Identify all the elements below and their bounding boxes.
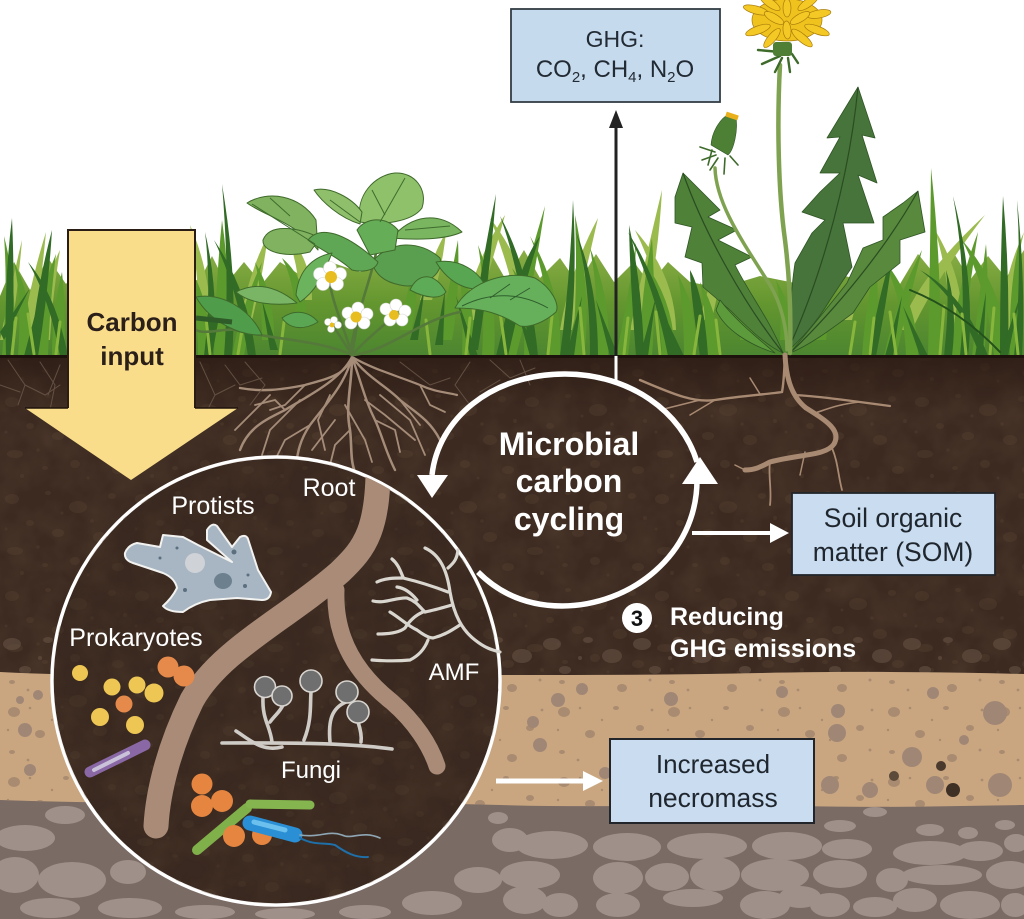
- fungi hyphae and sporangia: [222, 670, 392, 749]
- AMF hyphae: [372, 548, 500, 661]
- strawberry plant: [196, 173, 557, 355]
- grass blades, olive back layer: [0, 190, 1024, 340]
- microbial carbon cycling label: cycling: [514, 501, 624, 537]
- microbial carbon cycling label: Microbial: [499, 426, 639, 462]
- dandelion plant: [675, 0, 925, 353]
- yellow carbon input arrow: [25, 230, 238, 480]
- label: AMF: AMF: [429, 659, 479, 686]
- GHG box: , CH: [580, 56, 628, 83]
- grass highlights: [12, 306, 1018, 354]
- necromass box: Increased: [656, 749, 770, 779]
- strawberry leaves: [196, 173, 557, 335]
- grass layer: [0, 168, 1024, 357]
- strawberry plant roots: [235, 357, 457, 472]
- grass dark stolon: [910, 290, 1000, 352]
- carbon input label: Carbon: [86, 307, 178, 337]
- grass blades, dark green: [0, 184, 1023, 356]
- GHG emission arrow: [609, 110, 623, 380]
- SOM box: Soil organic: [824, 503, 962, 533]
- strawberry stems: [196, 240, 460, 355]
- arrow to SOM: [692, 523, 789, 543]
- soil layer: topsoil: [0, 355, 1024, 680]
- GHG box: 4: [628, 69, 636, 86]
- strawberry flowers: [314, 262, 411, 332]
- arrow to necromass: [496, 771, 603, 791]
- GHG box: GHG:: [586, 26, 644, 52]
- GHG box: 2: [572, 69, 580, 86]
- prokaryotes yellow and orange cocci: [72, 656, 194, 734]
- GHG box: O: [676, 56, 694, 83]
- amoeba protist: [125, 525, 271, 612]
- microbial cycle ring: [417, 374, 718, 606]
- reducing GHG emissions note: Reducing: [670, 603, 784, 631]
- faint surface roots: [0, 360, 535, 415]
- GHG box: 2: [667, 69, 676, 86]
- root in circle: [156, 452, 437, 826]
- dandelion flower head: [742, 0, 832, 72]
- GHG box: [511, 9, 720, 102]
- soil layer: sand: [0, 672, 1024, 807]
- circle inset: soil microbes: [50, 452, 505, 905]
- GHG box: , N: [636, 56, 667, 83]
- reducing GHG emissions note: GHG emissions: [670, 635, 856, 663]
- dandelion roots: [640, 355, 890, 505]
- necromass box: necromass: [648, 783, 778, 813]
- microbial carbon cycling label: carbon: [516, 463, 622, 499]
- SOM box: matter (SOM): [813, 537, 973, 567]
- grass base mass: [0, 250, 1024, 357]
- label: Protists: Protists: [171, 492, 255, 520]
- dandelion leaves: [675, 87, 925, 353]
- label: Prokaryotes: Prokaryotes: [69, 624, 203, 652]
- grass blades, mid green: [2, 168, 1023, 356]
- dandelion bud: [700, 114, 738, 174]
- sand pebbles: [16, 683, 1012, 798]
- gravel stones: [0, 806, 1024, 919]
- soil layer: gravel: [0, 790, 1024, 919]
- purple rod bacterium: [90, 745, 145, 772]
- GHG box: CO: [536, 56, 572, 83]
- label: Fungi: Fungi: [281, 757, 341, 784]
- lower bacteria cluster: [191, 774, 380, 857]
- reducing GHG emissions note: 3: [631, 606, 643, 631]
- reducing GHG emissions note: [622, 603, 856, 663]
- SOM box: [792, 493, 995, 575]
- label: Root: Root: [303, 474, 355, 502]
- necromass box: [610, 739, 814, 823]
- dandelion stems: [715, 65, 790, 353]
- carbon input label: input: [100, 341, 164, 371]
